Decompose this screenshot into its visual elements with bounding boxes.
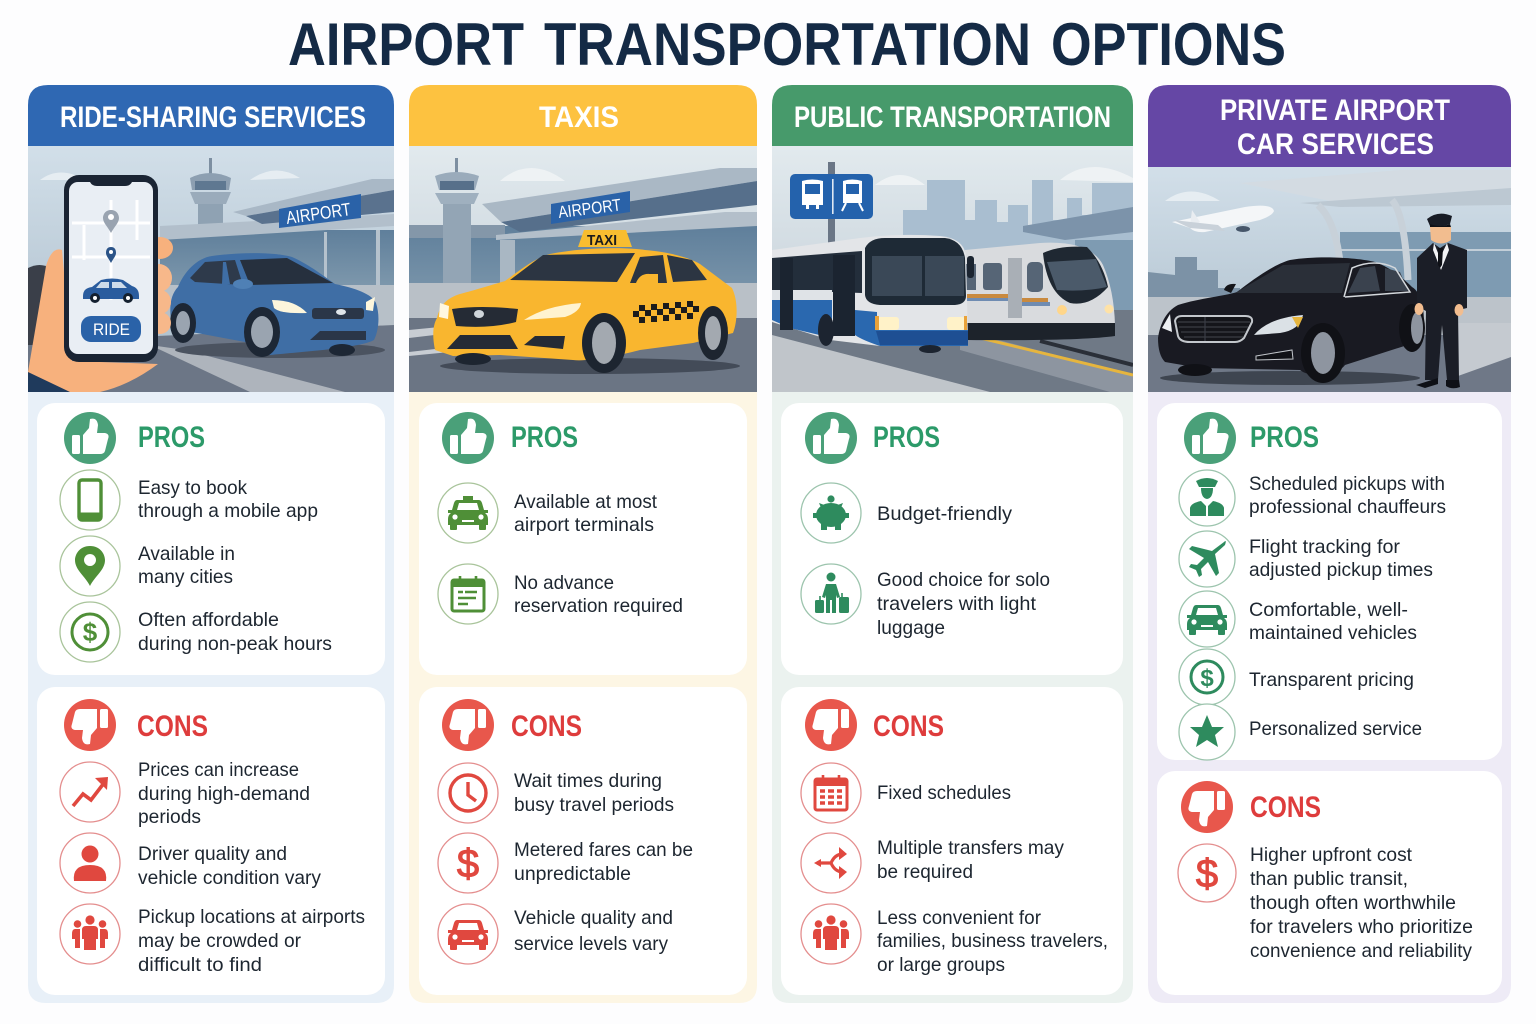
con: multiple transfers: Multiple transfers may — [877, 837, 1064, 859]
pro: scheduled pickups: Scheduled pickups with — [1249, 473, 1445, 495]
con: less convenient — [801, 904, 1108, 976]
heading: cons — [64, 699, 208, 751]
con: higher upfront cost: Higher upfront cost — [1250, 844, 1413, 866]
yellow taxi — [433, 230, 740, 374]
airplane — [1172, 206, 1274, 232]
blue car — [170, 253, 385, 358]
pro: personalized service: Personalized service — [1249, 718, 1422, 740]
con: less convenient: families, business travelers, — [877, 930, 1108, 952]
con: higher upfront cost: $ — [1196, 852, 1218, 896]
title: OPTIONS — [1051, 11, 1286, 78]
card: pros — [419, 403, 747, 675]
pro: scheduled pickups — [1179, 470, 1446, 526]
pro: easy to book — [60, 470, 318, 530]
pro: no reservation — [438, 564, 683, 624]
heading: pros — [442, 412, 578, 464]
black car — [1158, 257, 1425, 385]
pro: personalized service — [1179, 704, 1422, 760]
con: vehicle quality: service levels vary — [514, 933, 668, 955]
illustration: black car and chauffeur — [1148, 167, 1511, 392]
con: driver quality — [60, 833, 321, 893]
pro: flight tracking — [1179, 531, 1433, 587]
con: multiple transfers — [801, 833, 1064, 893]
card: cons — [1157, 771, 1502, 995]
header: ride-sharing services: RIDE-SHARING SERVICES — [60, 101, 366, 134]
train — [965, 243, 1115, 340]
illustration: yellow taxi at airport — [409, 146, 757, 392]
pro: comfortable vehicles: maintained vehicles — [1249, 622, 1417, 644]
con: prices can increase: Prices can increase — [138, 759, 299, 781]
header: taxis: TAXIS — [539, 101, 619, 134]
smartphone with ride app: RIDE — [93, 320, 130, 339]
heading: pros — [805, 412, 940, 464]
sign: airport: AIRPORT — [557, 195, 622, 222]
pro: budget-friendly: Budget-friendly — [877, 503, 1012, 525]
pro: available in many cities: many cities — [138, 566, 233, 588]
con: pickup locations: difficult to find — [138, 954, 262, 976]
heading: pros: PROS — [1250, 421, 1319, 454]
panel: ride-sharing services — [28, 85, 394, 1003]
card: cons — [419, 687, 747, 995]
taxi checker stripe — [633, 301, 699, 323]
sign: airport: AIRPORT — [285, 199, 352, 228]
header: public transportation: PUBLIC TRANSPORTATION — [794, 101, 1111, 134]
con: multiple transfers: be required — [877, 861, 973, 883]
panel: public transportation — [772, 85, 1133, 1003]
pro: often affordable: $ — [83, 617, 98, 647]
pro: available at terminals: Available at most — [514, 491, 658, 513]
pro: solo travelers: Good choice for solo — [877, 569, 1050, 591]
card: cons — [37, 687, 385, 995]
pro: solo travelers: luggage — [877, 617, 945, 639]
heading: cons: CONS — [511, 710, 582, 743]
card: pros — [781, 403, 1123, 675]
heading: pros: PROS — [138, 421, 205, 454]
header: private airport car services: PRIVATE AIRPORT — [1220, 94, 1450, 127]
chauffeur — [1414, 214, 1467, 388]
header: taxis — [409, 85, 757, 146]
heading: cons: CONS — [873, 710, 944, 743]
bus — [772, 235, 974, 353]
pro: available in many cities: Available in — [138, 543, 235, 565]
con: higher upfront cost: though often worthwhile — [1250, 892, 1456, 914]
con: prices can increase: periods — [138, 806, 201, 828]
con: metered fares — [438, 833, 693, 893]
heading: cons: CONS — [137, 710, 208, 743]
con: prices can increase — [60, 759, 310, 828]
illustration: bus and train — [772, 146, 1133, 392]
heading: pros: PROS — [873, 421, 940, 454]
heading: cons — [442, 699, 582, 751]
card: pros — [37, 403, 385, 675]
con: wait times — [438, 763, 674, 823]
panel: taxis — [409, 85, 757, 1003]
con: wait times: Wait times during — [514, 770, 662, 792]
con: higher upfront cost — [1178, 844, 1473, 962]
pro: often affordable: during non-peak hours — [138, 633, 332, 655]
con: driver quality: Driver quality and — [138, 843, 287, 865]
con: vehicle quality: Vehicle quality and — [514, 907, 673, 929]
pro: no reservation: No advance — [514, 572, 614, 594]
pro: flight tracking: Flight tracking for — [1249, 536, 1401, 558]
heading: cons — [1181, 781, 1321, 833]
pro: solo travelers: travelers with light — [877, 593, 1037, 615]
header: ride-sharing services — [28, 85, 394, 146]
con: fixed schedules — [801, 763, 1011, 823]
con: metered fares: unpredictable — [514, 863, 631, 885]
pro: flight tracking: adjusted pickup times — [1249, 559, 1433, 581]
card: cons — [781, 687, 1123, 995]
yellow taxi: TAXI — [587, 233, 617, 249]
heading: cons — [805, 699, 944, 751]
con: pickup locations: Pickup locations at airports — [138, 906, 365, 928]
pro: available in many cities — [60, 536, 235, 596]
pro: transparent pricing — [1179, 649, 1414, 705]
illustration: phone and blue car at airport — [28, 146, 394, 392]
pro: often affordable: Often affordable — [138, 609, 279, 631]
header: public transportation — [772, 85, 1133, 146]
pro: scheduled pickups: professional chauffeurs — [1249, 496, 1446, 518]
pro: solo travelers — [801, 564, 1050, 639]
heading: pros — [1184, 412, 1319, 464]
pro: often affordable — [60, 602, 332, 662]
con: wait times: busy travel periods — [514, 794, 674, 816]
con: metered fares: Metered fares can be — [514, 839, 693, 861]
con: metered fares: $ — [457, 842, 479, 886]
pro: comfortable vehicles — [1179, 591, 1417, 647]
panel: private airport car services — [1148, 85, 1511, 1003]
pro: no reservation: reservation required — [514, 595, 683, 617]
heading: pros: PROS — [511, 421, 578, 454]
pro: easy to book: through a mobile app — [138, 500, 318, 522]
header: private airport car services — [1148, 85, 1511, 167]
pro: transparent pricing: Transparent pricing — [1249, 669, 1414, 691]
pro: comfortable vehicles: Comfortable, well- — [1249, 599, 1408, 621]
con: less convenient: Less convenient for — [877, 907, 1041, 929]
pro: available at terminals — [438, 483, 658, 543]
title: TRANSPORTATION — [544, 11, 1031, 78]
heading: cons: CONS — [1250, 791, 1321, 824]
hand holding phone — [28, 237, 173, 392]
con: less convenient: or large groups — [877, 954, 1005, 976]
con: prices can increase: during high-demand — [138, 783, 310, 805]
pro: transparent pricing: $ — [1200, 665, 1214, 692]
bus stop sign — [790, 162, 873, 244]
heading: pros — [64, 412, 205, 464]
pro: available at terminals: airport terminals — [514, 514, 654, 536]
con: higher upfront cost: convenience and reliability — [1250, 940, 1472, 962]
pro: budget-friendly — [801, 483, 1012, 543]
con: fixed schedules: Fixed schedules — [877, 782, 1011, 804]
title — [288, 11, 1286, 78]
smartphone with ride app — [64, 175, 158, 362]
con: higher upfront cost: than public transit, — [1250, 868, 1408, 890]
pro: easy to book: Easy to book — [138, 477, 247, 499]
title: AIRPORT — [288, 11, 524, 78]
con: pickup locations: may be crowded or — [138, 930, 301, 952]
con: higher upfront cost: for travelers who prioritize — [1250, 916, 1473, 938]
con: driver quality: vehicle condition vary — [138, 867, 321, 889]
con: vehicle quality — [438, 904, 673, 964]
con: pickup locations — [60, 904, 365, 976]
header: private airport car services: CAR SERVICES — [1237, 128, 1434, 161]
card: pros — [1157, 403, 1502, 760]
